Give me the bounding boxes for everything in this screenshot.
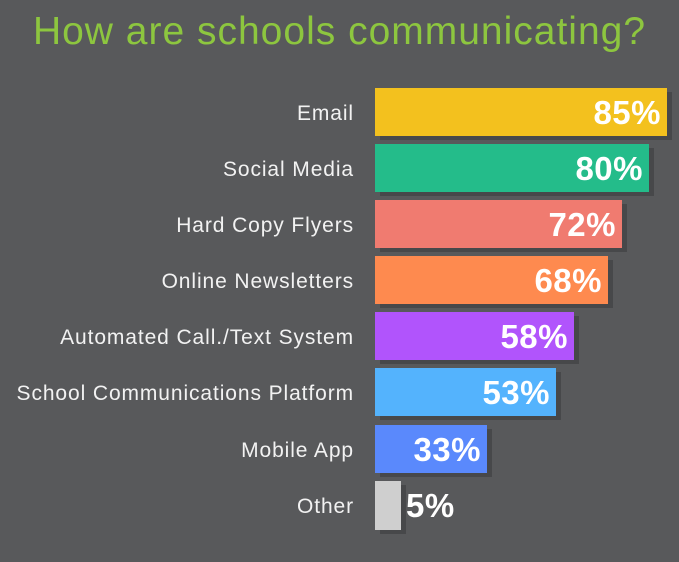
row: Email [297, 88, 672, 140]
row: Hard Copy Flyers: 72% [548, 206, 616, 243]
row: Mobile App [241, 425, 492, 477]
row: Email: Email [297, 102, 354, 125]
row: Automated [60, 312, 579, 364]
row: Other: Other [297, 495, 354, 518]
row: Other: 5% [406, 487, 455, 524]
row: Online Newsletters [162, 256, 613, 308]
row: Online Newsletters: 68% [534, 262, 602, 299]
row: School Communications Platform: 53% [482, 374, 550, 411]
row: Mobile App: 33% [413, 431, 481, 468]
row: Automated: 58% [500, 318, 568, 355]
row: Mobile App: Mobile App [241, 439, 354, 462]
row: Online Newsletters: Online Newsletters [162, 270, 354, 293]
row: Social Media: Social Media [223, 158, 354, 181]
row: School Communications Platform [17, 368, 561, 420]
row: School Communications Platform: School Communications Platform [17, 382, 354, 405]
row: Social Media [223, 144, 654, 196]
row: Hard Copy Flyers: Hard Copy Flyers [176, 214, 354, 237]
row: Automated: Automated Call./Text System [60, 326, 354, 349]
title: How are schools communicating? [33, 10, 646, 53]
row: Social Media: 80% [575, 150, 643, 187]
row: Other [297, 481, 455, 534]
row: Email: 85% [593, 94, 661, 131]
row: Hard Copy Flyers [176, 200, 627, 252]
